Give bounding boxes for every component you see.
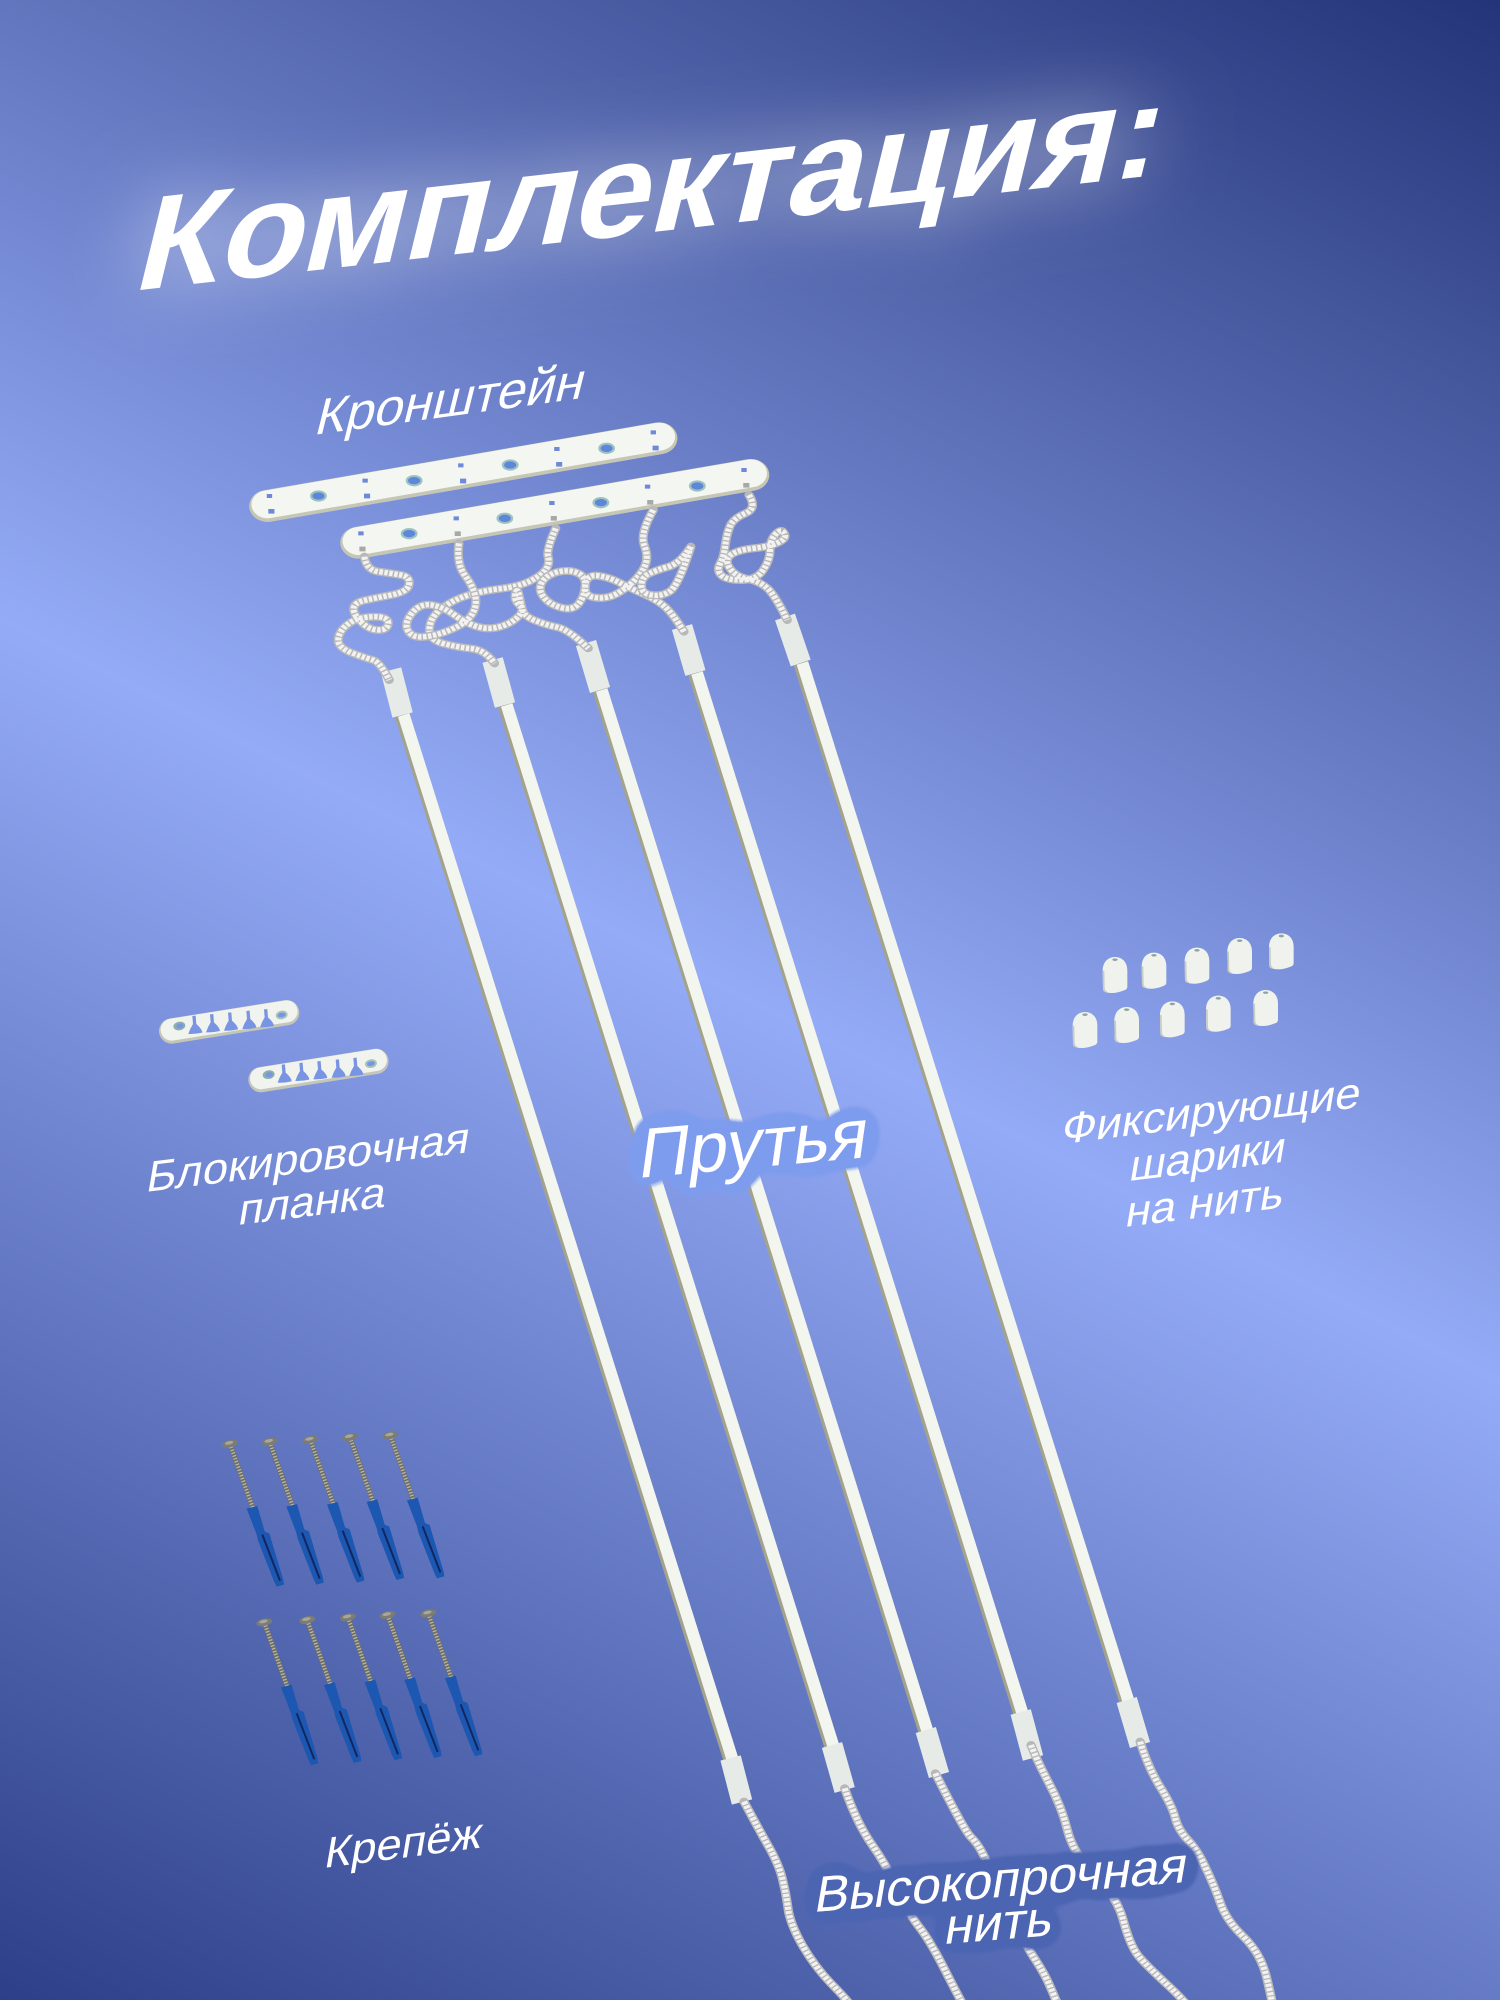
rod 5	[785, 617, 1140, 1745]
rod 2	[493, 660, 845, 1790]
label: high-strength cord: нить	[941, 1889, 1059, 1955]
label: locking bar	[143, 1114, 474, 1235]
icon: screws and wall plugs	[221, 1430, 482, 1765]
icon: locking bars	[172, 1009, 378, 1083]
bracket: front	[358, 468, 751, 551]
label: locking bar: планка	[235, 1168, 391, 1235]
label: fixing balls: Фиксирующие	[1058, 1069, 1365, 1154]
label: fixing balls	[1058, 1069, 1365, 1237]
label: rods: Прутья	[635, 1094, 874, 1194]
label: bracket: Кронштейн	[310, 352, 593, 447]
rod 1	[391, 670, 742, 1802]
rod 4	[682, 627, 1033, 1758]
label: fixing balls: на нить	[1122, 1169, 1288, 1237]
label: fixing balls: шарики	[1126, 1123, 1290, 1191]
label: high-strength cord: Высокопрочная	[811, 1836, 1193, 1923]
tangled cords at top	[338, 495, 787, 680]
cords at bottom	[744, 1742, 1274, 2000]
label: fasteners: Крепёж	[321, 1809, 487, 1878]
label: locking bar: Блокировочная	[143, 1114, 474, 1202]
rod 3	[586, 643, 939, 1775]
icon: fixing balls	[1073, 933, 1294, 1048]
bracket: rear	[267, 430, 659, 514]
title: Комплектация:	[124, 53, 1184, 321]
